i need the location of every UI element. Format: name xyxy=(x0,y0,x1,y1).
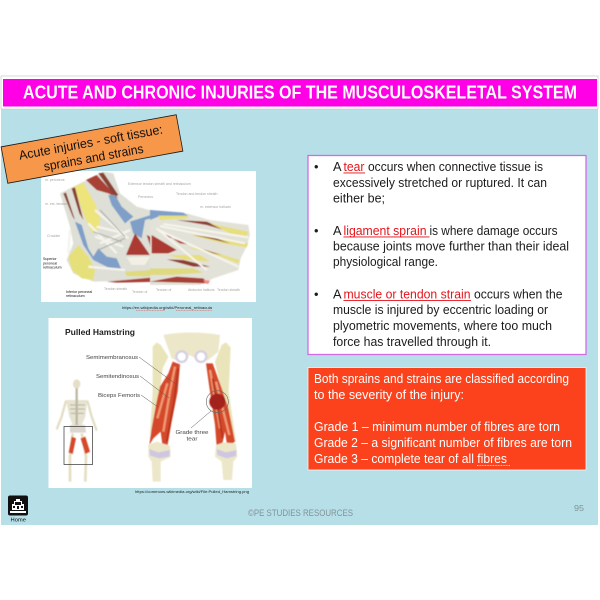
tear bullet: A xyxy=(333,159,342,174)
orange callout: acute injuries: Acute injuries - soft tissue: xyxy=(18,122,164,163)
foot anatomy image: Tendon sheath xyxy=(217,288,240,292)
muscle or tendon strain bullet: occurs when the xyxy=(474,286,562,302)
muscle labels and leader lines: Grade three xyxy=(176,430,208,436)
muscle or tendon strain bullet: • xyxy=(314,286,318,302)
heading: pulled hamstring: Pulled Hamstring xyxy=(65,328,135,337)
muscle labels and leader lines: tear xyxy=(186,436,198,442)
grades panel: to the severity of the injury: xyxy=(314,387,464,402)
ligament sprain bullet: ligament sprain xyxy=(344,223,426,238)
foot anatomy image: retinaculum xyxy=(43,266,62,270)
hamstring image source link: https://commons.wikimedia.org/wiki/File:Pulled_Hamstring.png xyxy=(135,489,249,494)
locator box xyxy=(64,426,92,464)
foot anatomy image: Superior xyxy=(43,257,57,261)
grades panel: Grade 1 – minimum number of fibres are torn xyxy=(314,419,560,434)
foot anatomy image: Tendon and tendon sheath xyxy=(176,192,218,196)
orange callout: acute injuries xyxy=(1,115,183,183)
foot anatomy image: Extensor tendon sheath and retinaculum xyxy=(128,182,191,186)
muscle labels and leader lines: Semimembranosus xyxy=(86,355,138,361)
small skeleton figure xyxy=(57,379,97,482)
muscle labels and leader lines: Biceps Femoris xyxy=(98,393,140,399)
tear bullet xyxy=(314,159,547,206)
grades panel: Grade 3 – complete tear of all fibres xyxy=(314,451,507,466)
slide background xyxy=(1,76,598,525)
hamstring anatomy image xyxy=(48,318,252,488)
foot anatomy image: m. extensor hallucis xyxy=(200,205,231,209)
foot anatomy image: Abductor hallucis xyxy=(188,288,215,292)
muscle or tendon strain bullet: force has travelled through it. xyxy=(333,334,491,349)
foot anatomy image: Inferior peroneal xyxy=(66,290,92,294)
ligament sprain bullet: physiological range. xyxy=(333,254,438,269)
muscle or tendon strain bullet xyxy=(314,286,562,349)
tear bullet: tear xyxy=(344,159,365,174)
foot anatomy image: retinaculum xyxy=(66,294,85,298)
ligament sprain bullet: because joints move further than their ideal xyxy=(333,238,569,254)
muscle or tendon strain bullet: A xyxy=(333,286,342,302)
muscle labels and leader lines xyxy=(86,355,228,442)
page number: 95 xyxy=(574,503,584,513)
ligament sprain bullet: • xyxy=(314,223,318,238)
foot anatomy image: Tendon of xyxy=(156,288,171,292)
muscle or tendon strain bullet: plyometric movements, where too much xyxy=(333,318,552,333)
grades panel: Both sprains and strains are classified according xyxy=(314,371,569,386)
tear bullet: either be; xyxy=(333,190,385,206)
grades panel xyxy=(308,368,586,470)
ligament sprain bullet xyxy=(314,223,569,269)
copyright footer: ©PE STUDIES RESOURCES xyxy=(248,508,353,518)
foot image source link: https://en.wikipedia.org/wiki/Peroneal_retinacula xyxy=(122,305,213,310)
foot anatomy image: m. ext. tendon xyxy=(45,202,67,206)
foot anatomy image: Tendon sheath xyxy=(104,287,127,291)
title banner xyxy=(1,76,598,109)
foot anatomy image: Tendon of xyxy=(132,290,147,294)
ligament sprain bullet: is where damage occurs xyxy=(430,223,558,238)
home icon: Home xyxy=(10,518,26,524)
muscle or tendon strain bullet: muscle or tendon strain xyxy=(344,286,470,302)
home icon xyxy=(8,496,28,524)
foot anatomy image: peroneal xyxy=(43,262,57,266)
foot anatomy image: Peroneus xyxy=(138,195,153,199)
tear bullet: excessively stretched or ruptured. It can xyxy=(333,175,547,190)
tear bullet: occurs when connective tissue is xyxy=(368,159,543,174)
orange callout: acute injuries: sprains and strains xyxy=(43,141,145,174)
foot anatomy image: m. peroneus xyxy=(45,178,65,182)
muscle labels and leader lines: Semitendinosus xyxy=(96,374,139,380)
grades panel: Grade 2 – a significant number of fibres are torn xyxy=(314,435,572,450)
foot anatomy image xyxy=(41,171,256,302)
definitions text panel xyxy=(308,156,586,354)
foot anatomy image: Cruciate xyxy=(47,234,60,238)
muscle or tendon strain bullet: muscle is injured by eccentric loading or xyxy=(333,302,549,317)
legs with hamstring muscles xyxy=(148,332,237,482)
tear bullet: • xyxy=(314,159,318,174)
ligament sprain bullet: A xyxy=(333,223,342,238)
